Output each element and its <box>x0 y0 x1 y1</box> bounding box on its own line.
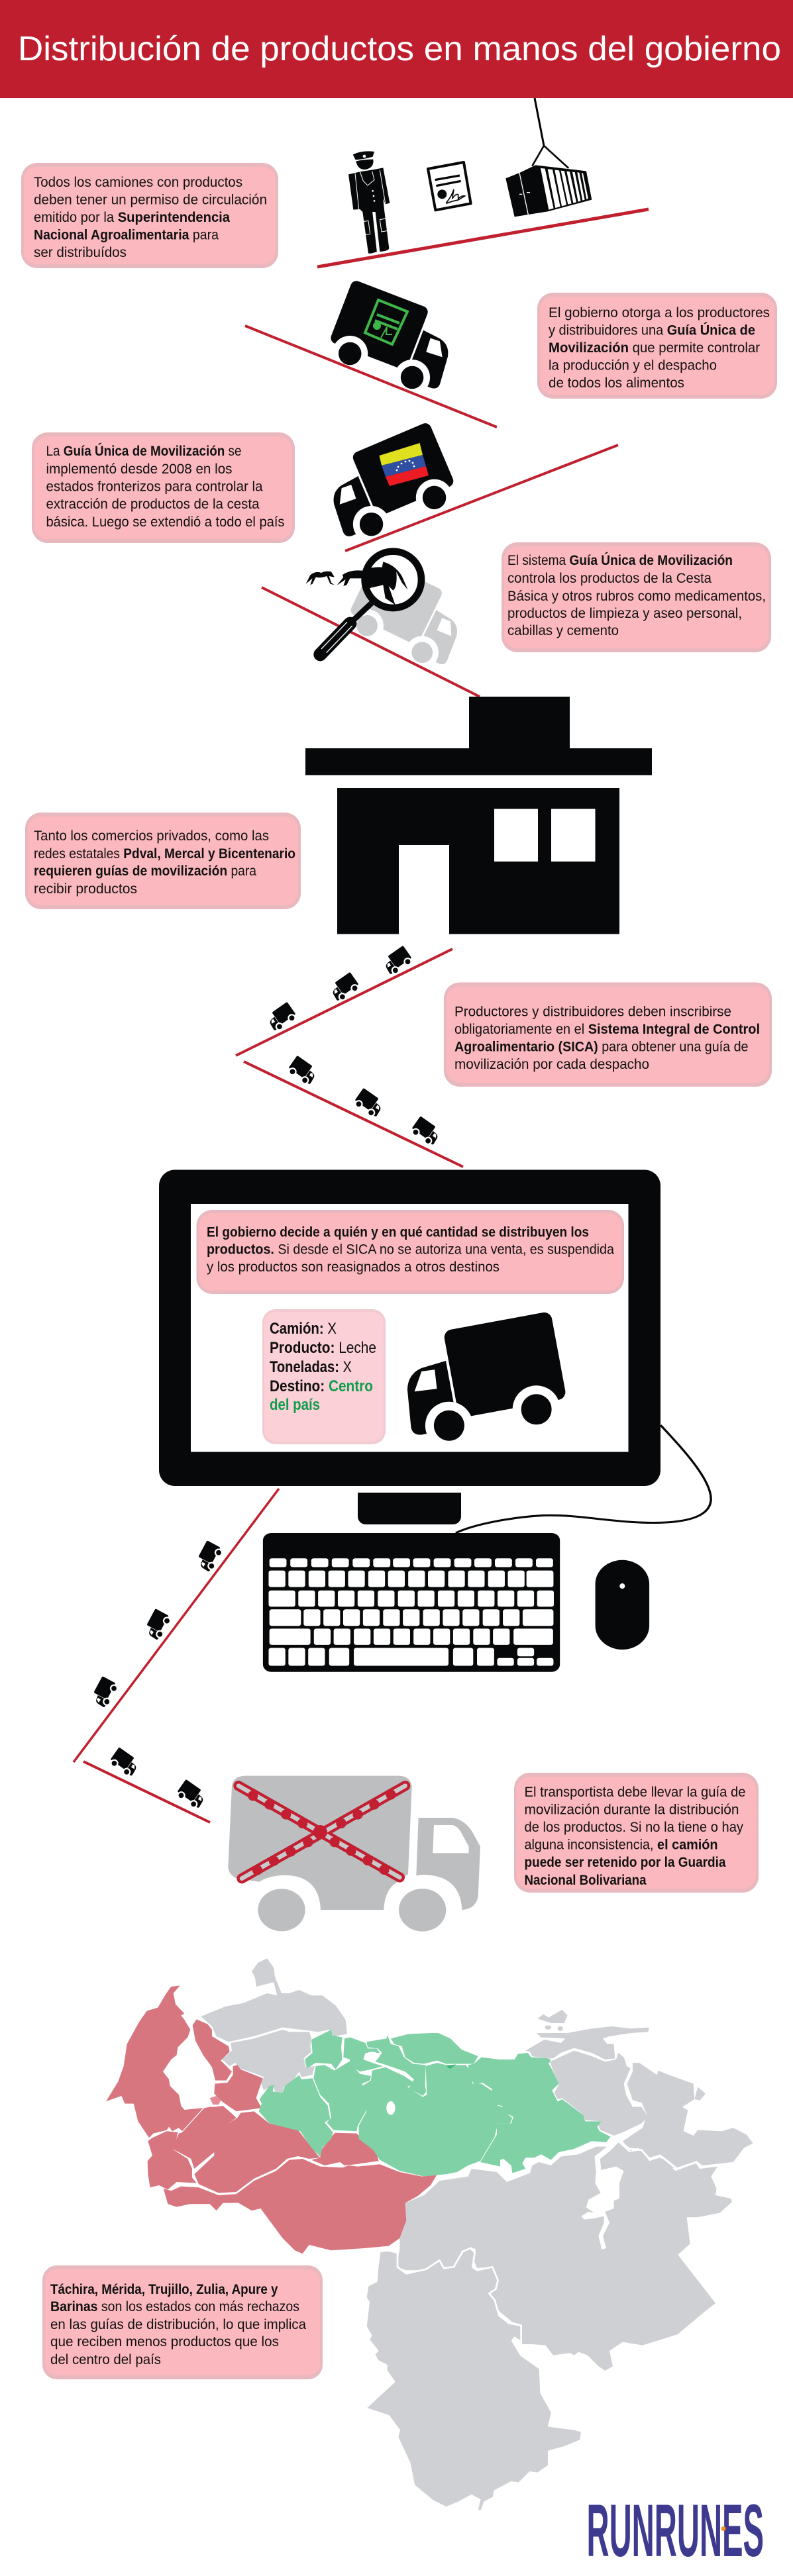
green states <box>259 2030 512 2177</box>
callout: gobierno decide: El gobierno decide a quién y en qué cantidad se distribuyen los <box>207 1225 589 1240</box>
icon: truck with green document <box>321 279 464 405</box>
callout: permiso: Todos los camiones con productos <box>34 175 242 190</box>
road line 4 <box>262 587 480 697</box>
callout: gobierno decide <box>196 1210 624 1294</box>
road line 1 <box>317 209 649 267</box>
callout: 2008: básica. Luego se extendió a todo el país <box>46 515 285 530</box>
monitor <box>159 1169 661 1524</box>
callout: gobierno decide: y los productos son reasignados a otros destinos <box>207 1260 500 1275</box>
icon: truck chained with red X <box>228 1776 480 1932</box>
callout: guía única: y distribuidores una Guía Única de <box>549 322 755 338</box>
small trucks on road 7 <box>89 1540 225 1709</box>
callout: estados: del centro del país <box>50 2352 161 2367</box>
callout: guía única: El gobierno otorga a los productores <box>549 305 770 321</box>
icon: guard <box>348 151 390 254</box>
callout: 2008: estados fronterizos para controlar la <box>46 479 263 494</box>
icon: permit document <box>428 162 471 210</box>
road line 6 <box>244 1062 463 1167</box>
road line 3 <box>345 445 618 551</box>
red chains <box>238 1786 405 1879</box>
title banner: Distribución de productos en manos del gobierno <box>18 30 781 68</box>
info card: truck data: Camión: X <box>270 1320 337 1338</box>
gray western states <box>201 1958 347 2093</box>
callout: 2008 <box>32 432 295 543</box>
info card: truck data: Producto: Leche <box>270 1339 376 1357</box>
state: Amazonas <box>366 2248 582 2511</box>
callout: sistema: El sistema Guía Única de Movilización <box>507 552 733 568</box>
road line 8 <box>83 1761 210 1822</box>
crane cable <box>535 98 544 146</box>
callout: transportista: de los productos. Si no la tiene o hay <box>525 1820 743 1835</box>
callout: permiso <box>21 163 278 268</box>
gray southern and eastern states <box>396 2010 753 2371</box>
callout: sistema <box>502 542 771 652</box>
callout: transportista: puede ser retenido por la Guardia <box>525 1855 726 1870</box>
callout: comercios: recibir productos <box>34 881 137 897</box>
callout: guía única: Movilización que permite controlar <box>549 340 760 356</box>
info card: truck data <box>262 1309 386 1444</box>
small trucks on road 8 <box>107 1747 208 1811</box>
info card: truck data: Toneladas: X <box>270 1358 352 1376</box>
green state: Anzoátegui side <box>446 2053 611 2173</box>
callout: estados: en las guías de distribución, lo que implica <box>50 2317 306 2332</box>
map of Venezuela <box>106 1958 753 2511</box>
callout: permiso: ser distribuídos <box>34 245 127 260</box>
callout: SICA: movilización por cada despacho <box>454 1057 649 1072</box>
red states <box>106 1985 437 2254</box>
callout: SICA <box>444 983 772 1087</box>
callout: sistema: Básica y otros rubros como medicamentos, <box>507 589 766 604</box>
building <box>305 697 652 934</box>
small trucks on road 5 <box>265 946 415 1034</box>
icon: magnifier with ants <box>306 552 421 654</box>
callout: estados: que reciben menos productos que los <box>50 2334 279 2350</box>
callout: guía única: de todos los alimentos <box>549 375 684 391</box>
cable, keyboard and mouse <box>263 1425 711 1672</box>
icon: container <box>505 146 592 217</box>
callout: guía única <box>537 293 777 399</box>
road line 7 <box>74 1489 279 1762</box>
icon: truck with Venezuelan flag <box>316 421 464 552</box>
callout: permiso: deben tener un permiso de circulación <box>34 192 267 208</box>
callout: guía única: la producción y el despacho <box>549 358 717 373</box>
callout: transportista: El transportista debe llevar la guía de <box>525 1785 746 1800</box>
callout: 2008: La Guía Única de Movilización se <box>46 443 241 459</box>
callout: SICA: Agroalimentario (SICA) para obtener una guía de <box>454 1040 749 1054</box>
road line 2 <box>245 326 497 427</box>
callout: SICA: obligatoriamente en el Sistema Integral de Control <box>454 1022 760 1037</box>
callout: gobierno decide: productos. Si desde el SICA no se autoriza una venta, es suspendida <box>207 1242 614 1257</box>
callout: transportista: alguna inconsistencia, el camión <box>525 1837 718 1853</box>
callout: 2008: extracción de productos de la cesta <box>46 497 260 512</box>
callout: comercios: Tanto los comercios privados, como las <box>34 828 269 844</box>
title banner <box>0 0 793 98</box>
callout: estados: Barinas son los estados con más rechazos <box>50 2299 299 2314</box>
callout: transportista <box>514 1773 759 1893</box>
small trucks on road 6 <box>286 1056 443 1148</box>
info card: truck data: Destino: Centro <box>270 1377 373 1395</box>
icon: truck on screen <box>395 1311 572 1456</box>
callout: transportista: Nacional Bolivariana <box>525 1873 647 1888</box>
icon: gray truck <box>340 558 474 679</box>
callout: transportista: movilización durante la distribución <box>525 1803 739 1817</box>
callout: sistema: controla los productos de la Cesta <box>507 571 712 586</box>
callout: permiso: Nacional Agroalimentaria para <box>34 228 219 242</box>
callout: estados <box>42 2265 323 2379</box>
callout: SICA: Productores y distribuidores deben inscribirse <box>454 1004 731 1020</box>
callout: estados: Táchira, Mérida, Trujillo, Zulia, Apure y <box>50 2282 278 2297</box>
callout: comercios: redes estatales Pdval, Mercal y Bicentenario <box>34 846 295 862</box>
callout: 2008: implementó desde 2008 en los <box>46 462 232 477</box>
callout: comercios: requieren guías de movilización para <box>34 864 256 879</box>
callout: comercios <box>25 813 301 909</box>
road line 5 <box>236 949 452 1056</box>
callout: sistema: cabillas y cemento <box>507 623 619 638</box>
info card: truck data: del país <box>270 1396 320 1414</box>
callout: permiso: emitido por la Superintendencia <box>34 210 230 225</box>
callout: sistema: productos de limpieza y aseo personal, <box>507 606 742 621</box>
